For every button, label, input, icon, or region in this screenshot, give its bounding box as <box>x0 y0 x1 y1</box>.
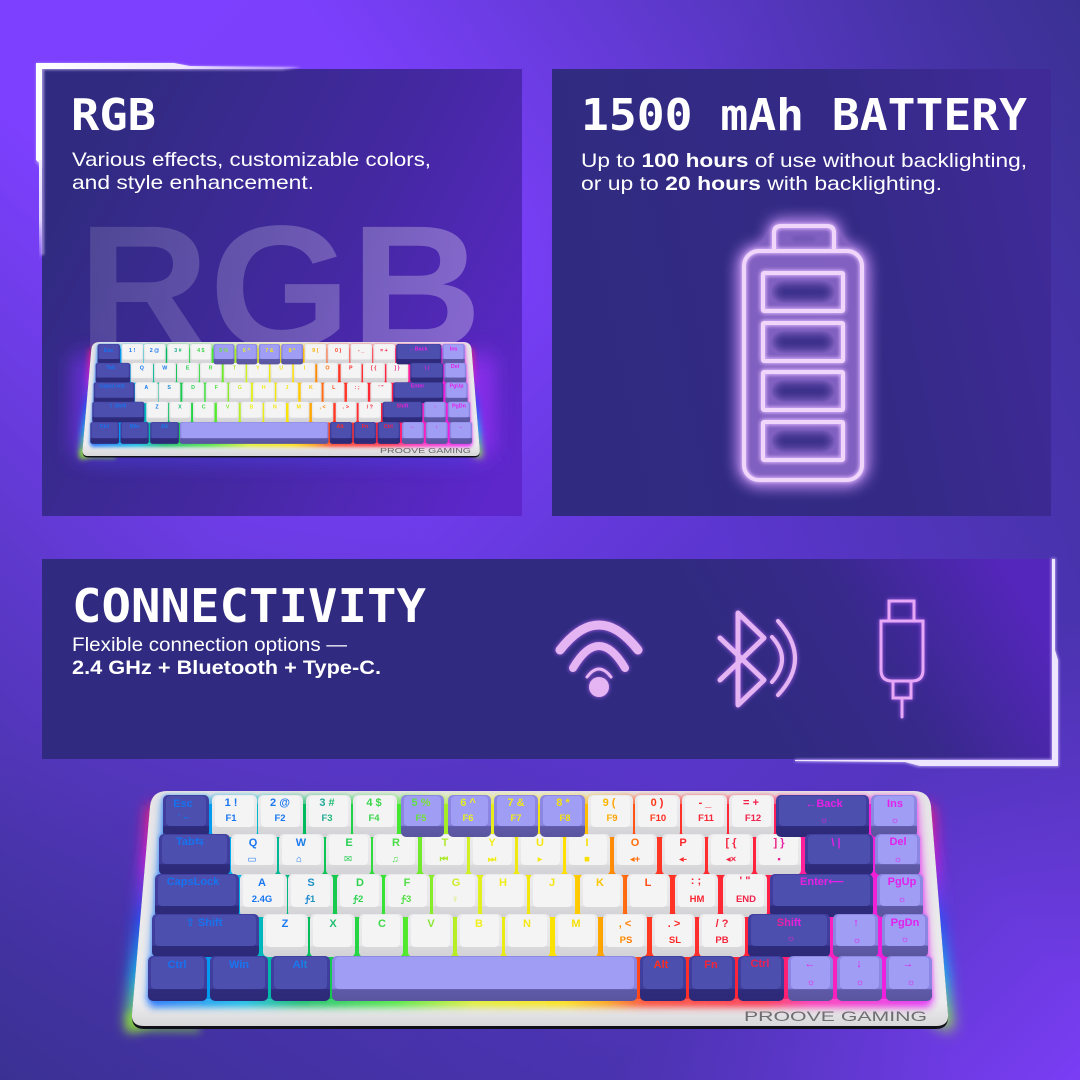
text: RGB description: Various effects, customizable colors, <box>72 149 431 171</box>
heading: RGB: RGB <box>71 90 156 141</box>
corner frame: connectivity panel <box>795 558 1059 767</box>
small keyboard legends: 6 ^ <box>243 348 250 354</box>
key legends: V <box>427 918 435 930</box>
small keyboard legends: Ctrl <box>100 424 110 430</box>
small keyboard legends: 8 * <box>289 348 296 354</box>
panel: RGB <box>36 63 522 516</box>
small keyboard legends: Alt <box>337 424 344 430</box>
key legends: F3 <box>321 813 333 824</box>
key legends: ∱1 <box>305 894 316 905</box>
small keyboard legends: I <box>304 366 306 372</box>
key legends: J <box>549 877 555 889</box>
small keyboard legends: ←Back <box>409 346 428 352</box>
small keyboard brand: PROOVE GAMING <box>380 448 471 455</box>
small keyboard legends: V <box>226 404 230 410</box>
key legends: Q <box>249 837 258 849</box>
key legends: ✉ <box>344 854 352 865</box>
small keyboard legends: ] } <box>394 366 400 372</box>
small keyboard legends: C <box>202 404 206 410</box>
small keyboard legends <box>99 346 466 430</box>
key legends: ⏮ <box>440 854 449 865</box>
small keyboard legends: T <box>233 366 237 372</box>
key legends: ☼ <box>891 815 899 826</box>
small keyboard legends: ← <box>410 424 415 430</box>
key legends: F7 <box>510 813 522 824</box>
key legends: Z <box>282 918 289 930</box>
small keyboard legends: W <box>162 366 168 372</box>
small keyboard legends: Del <box>451 364 460 370</box>
key legends: ☼ <box>807 977 815 988</box>
key legends: SL <box>669 935 681 946</box>
small keyboard legends: F <box>215 385 219 391</box>
small keyboard legends: K <box>309 385 313 391</box>
small keyboard legends: Ins <box>450 346 457 352</box>
small keyboard legends: P <box>349 366 353 372</box>
small keyboard legends: ' " <box>378 385 384 391</box>
key legends: ■ <box>584 854 590 865</box>
key legends: G <box>452 877 460 889</box>
small keyboard legends: - _ <box>358 348 365 354</box>
key legends: P <box>679 837 687 849</box>
small keyboard legends: B <box>250 404 254 410</box>
keyboard brand: PROOVE GAMING <box>744 1008 927 1024</box>
key legends: X <box>329 918 337 930</box>
key legends: = + <box>743 797 759 809</box>
key legends: . > <box>668 918 680 930</box>
corner frame: RGB panel <box>36 63 302 260</box>
text: battery description <box>581 150 1027 195</box>
key legends: 1 ! <box>225 797 237 809</box>
key legends: ☼ <box>820 815 828 826</box>
key legends: F4 <box>368 813 380 824</box>
key legends: HM <box>690 894 704 905</box>
key legends: Alt <box>293 959 308 971</box>
heading: battery: 1500 mAh BATTERY <box>581 90 1028 141</box>
icon: battery <box>744 226 862 480</box>
key legends: A <box>258 877 266 889</box>
small keyboard legends: → <box>458 424 463 430</box>
icon: bluetooth <box>720 613 795 705</box>
small keyboard legends: PgDn <box>452 404 466 410</box>
small keyboard legends: D <box>191 385 195 391</box>
key legends: S <box>307 877 315 889</box>
keyboard: main keyboard <box>126 791 953 1033</box>
key legends: ⏭ <box>488 854 497 865</box>
key legends: , < <box>619 918 631 930</box>
key legends: Fn <box>704 959 718 971</box>
key legends: PgUp <box>888 876 917 888</box>
key legends: F9 <box>606 813 618 824</box>
small keyboard legends: S <box>167 385 171 391</box>
key legends: ↓ <box>856 958 862 970</box>
small keyboard legends: X <box>178 404 182 410</box>
key legends: 5 % <box>412 797 431 809</box>
key legends: ☼ <box>787 933 795 944</box>
panel: battery <box>552 69 1051 516</box>
key legends: F5 <box>415 813 427 824</box>
key legends: CapsLock <box>167 876 220 888</box>
text: battery description: Up to 100 hours of use without backlighting, <box>581 150 1027 172</box>
key legends: Enter⟵ <box>800 876 844 888</box>
key legends: ⇧ Shift <box>186 917 223 929</box>
key legends: ← <box>804 958 816 970</box>
key legends: ▸ <box>538 854 543 865</box>
key legends: I <box>585 837 589 849</box>
key legends: Alt <box>654 959 669 971</box>
key legends: O <box>631 837 640 849</box>
key legends: 2.4G <box>252 894 272 905</box>
key legends: Ins <box>887 798 903 810</box>
icon: wifi <box>560 625 638 697</box>
key legends: M <box>571 918 581 930</box>
key legends: ▪ <box>777 854 781 865</box>
key legends: ☼ <box>856 977 864 988</box>
heading: connectivity: CONNECTIVITY <box>72 579 426 633</box>
key legends: 8 * <box>556 797 570 809</box>
key legends: Tab⇆ <box>176 836 204 848</box>
small keyboard legends: G <box>238 385 242 391</box>
key legends: ☼ <box>901 934 909 945</box>
key legends: C <box>378 918 386 930</box>
key legends: ♀ <box>451 894 459 905</box>
small keyboard legends: Ctrl <box>384 424 393 430</box>
small keyboard haze <box>74 355 492 459</box>
ghost text: RGB: RGB <box>78 190 482 386</box>
small keyboard legends: 1 ! <box>129 348 135 354</box>
key legends: [ { <box>726 837 737 849</box>
key legends: PS <box>620 935 632 946</box>
key legends: ♫ <box>391 854 399 865</box>
small keyboard legends: = + <box>380 348 388 354</box>
small keyboard legends: 5 % <box>219 348 229 354</box>
key legends: T <box>442 837 449 849</box>
small keyboard legends: 3 # <box>174 348 182 354</box>
small keyboard legends: ⇧ Shift <box>109 403 127 410</box>
text: connectivity description <box>72 634 381 679</box>
key legends: D <box>356 877 364 889</box>
key legends: ] } <box>774 837 785 849</box>
key legends: Del <box>889 836 907 848</box>
small keyboard legends: Q <box>140 366 144 372</box>
small keyboard legends: J <box>286 385 289 391</box>
key legends: ☼ <box>853 935 861 946</box>
small keyboard legends: Shift <box>397 404 409 410</box>
text: connectivity description: 2.4 GHz + Bluetooth + Type-C. <box>72 657 381 679</box>
small keyboard legends: O <box>325 366 330 372</box>
small keyboard legends: Tab <box>106 365 116 371</box>
small keyboard legends: Fn <box>362 424 368 430</box>
small keyboard legends: R <box>209 366 213 372</box>
small keyboard legends: [ { <box>371 366 376 372</box>
key legends: ←Back <box>805 798 844 810</box>
key legends: F1 <box>225 813 237 824</box>
key legends: U <box>536 837 544 849</box>
key legends: ⌂ <box>296 854 302 865</box>
small keyboard legends: N <box>273 404 277 410</box>
key legends: ∱2 <box>353 894 363 905</box>
key legends: PgDn <box>891 917 920 929</box>
small keyboard legends: 0 ) <box>335 348 342 354</box>
key legends <box>167 797 920 988</box>
key legends: Win <box>229 959 249 971</box>
key legends: Ctrl <box>168 959 186 971</box>
text: RGB description <box>72 149 431 194</box>
small keyboard legends: Alt <box>161 424 168 430</box>
small keyboard legends: E <box>186 366 190 372</box>
small keyboard legends: \ | <box>425 366 430 372</box>
keyboard: small RGB keyboard <box>74 342 492 459</box>
key legends: ◂× <box>726 854 737 865</box>
key legends: Ctrl <box>751 958 769 970</box>
key legends: : ; <box>691 875 701 887</box>
key legends: - _ <box>699 797 712 809</box>
small keyboard legends: L <box>332 385 336 391</box>
key legends: 0 ) <box>651 797 664 809</box>
small keyboard legends: Enter <box>411 384 424 390</box>
small keyboard legends: 4 $ <box>197 348 205 354</box>
key legends: 6 ^ <box>460 797 476 809</box>
key legends: F2 <box>274 813 286 824</box>
key legends: ' " <box>740 875 750 887</box>
small keyboard legends: Y <box>256 366 260 372</box>
icon: USB Type-C <box>881 601 923 717</box>
key legends: → <box>902 958 914 970</box>
small keyboard legends: M <box>296 404 301 410</box>
small keyboard legends: A <box>144 385 148 391</box>
key legends: B <box>475 918 483 930</box>
small keyboard legends: 7 & <box>265 348 274 354</box>
key legends: ☼ <box>898 894 906 905</box>
small keyboard legends: ↑ <box>434 404 436 410</box>
small keyboard legends: Win <box>130 424 139 430</box>
key legends: ◂- <box>679 854 687 865</box>
panel: connectivity <box>42 558 1059 767</box>
text: battery description: or up to 20 hours with backlighting. <box>581 173 942 195</box>
key legends: PB <box>715 935 729 946</box>
key legends: ☼ <box>894 854 902 865</box>
key legends: END <box>736 894 756 905</box>
small keyboard legends: Z <box>155 404 159 410</box>
key legends: L <box>645 877 652 889</box>
key legends: ◂+ <box>630 854 641 865</box>
key legends: K <box>596 877 604 889</box>
key legends: F10 <box>650 813 666 824</box>
small keyboard legends: CapsLock <box>99 384 125 390</box>
small keyboard legends: . > <box>343 404 349 410</box>
key legends: F12 <box>745 813 761 824</box>
key legends: ☼ <box>907 977 915 988</box>
key legends: F8 <box>559 813 571 824</box>
small keyboard legends: 9 ( <box>312 348 319 354</box>
key legends: ▭ <box>248 854 257 865</box>
key legends: E <box>345 837 353 849</box>
small keyboard legends: , < <box>320 404 326 410</box>
small keyboard legends: U <box>279 366 283 372</box>
key legends: 9 ( <box>603 797 616 809</box>
small keyboard legends: PgUp <box>450 384 464 390</box>
small keyboard legends: H <box>262 385 266 391</box>
small keyboard legends: : ; <box>355 385 360 391</box>
key legends: F <box>404 877 411 889</box>
small keyboard legends: Esc <box>104 348 114 354</box>
key legends: R <box>392 837 400 849</box>
key legends: N <box>523 918 531 930</box>
key legends: F6 <box>462 813 474 824</box>
key legends: / ? <box>716 918 729 930</box>
text: RGB description: and style enhancement. <box>72 172 314 194</box>
key legends: W <box>296 837 307 849</box>
key legends: Esc <box>173 798 193 810</box>
key legends: 4 $ <box>366 797 382 809</box>
key legends: \ | <box>831 837 841 849</box>
key legends: Y <box>488 837 496 849</box>
small keyboard legends: 2 @ <box>150 348 159 354</box>
key legends: Shift <box>777 917 802 929</box>
key legends: 2 @ <box>270 797 290 809</box>
key legends: H <box>499 877 507 889</box>
small keyboard legends: ↓ <box>435 424 438 430</box>
small keyboard legends: / ? <box>367 404 373 410</box>
key legends: 3 # <box>319 797 335 809</box>
text: connectivity description: Flexible connection options — <box>72 634 348 656</box>
key legends: ` ~ <box>177 813 189 824</box>
key legends: ∱3 <box>401 894 411 905</box>
key legends: 7 & <box>507 797 525 809</box>
key legends: F11 <box>698 813 715 824</box>
key legends: ↑ <box>853 917 859 929</box>
